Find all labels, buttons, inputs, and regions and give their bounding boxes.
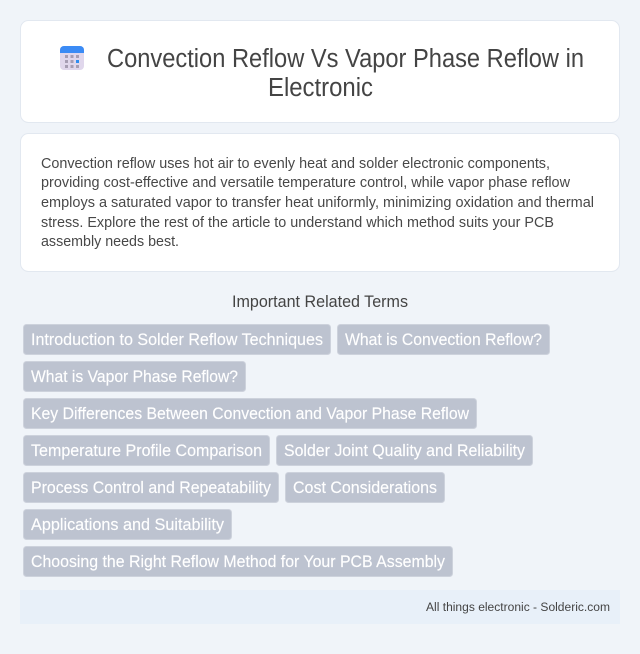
tag: temperature profile [24,436,270,466]
tag: cost considerations: Cost Considerations [293,479,437,497]
summary paragraph: providing cost-effective and versatile temperature control, while vapor phase reflow [41,174,570,191]
tag: cost considerations [286,472,444,502]
heading: important related terms: Important Related Terms [232,293,408,311]
tag: vapor phase reflow [24,362,246,392]
tag: temperature profile: Temperature Profile Comparison [31,442,262,460]
title: Convection Reflow Vs Vapor Phase Reflow in [107,45,584,73]
tag: process control: Process Control and Repeatability [31,479,272,497]
title: Electronic [268,74,373,102]
tag list [24,324,550,576]
tag: applications: Applications and Suitability [31,516,225,534]
panel: summary card [20,134,620,272]
tag: convection reflow: What is Convection Reflow? [345,331,542,349]
tag: vapor phase reflow: What is Vapor Phase Reflow? [31,368,238,386]
tag: process control [24,472,278,502]
tag: key differences [24,398,476,428]
summary paragraph: employs a saturated vapor to transfer heat uniformly, minimizing oxidation and thermal [41,194,594,211]
summary paragraph: stress. Explore the rest of the article to understand which method suits your PCB [41,214,554,231]
summary paragraph: assembly needs best. [41,233,179,250]
footer [20,590,620,624]
tag: applications [24,510,232,540]
tag: key differences: Key Differences Between Convection and Vapor Phase Reflow [31,405,469,423]
icon: calendar [60,46,84,70]
title [107,45,584,102]
tag: choosing method [24,546,452,576]
summary paragraph: Convection reflow uses hot air to evenly heat and solder electronic components, [41,155,550,172]
tag: choosing method: Choosing the Right Reflow Method for Your PCB Assembly [31,553,446,571]
tag: introduction: Introduction to Solder Reflow Techniques [31,331,323,349]
footer: All things electronic - Solderic.com [426,600,610,614]
summary paragraph [41,155,594,250]
tag: solder joint quality [276,436,532,466]
panel: title card [20,20,620,122]
tag: introduction [24,324,330,354]
tag: convection reflow [338,324,550,354]
tag: solder joint quality: Solder Joint Quality and Reliability [284,442,526,460]
